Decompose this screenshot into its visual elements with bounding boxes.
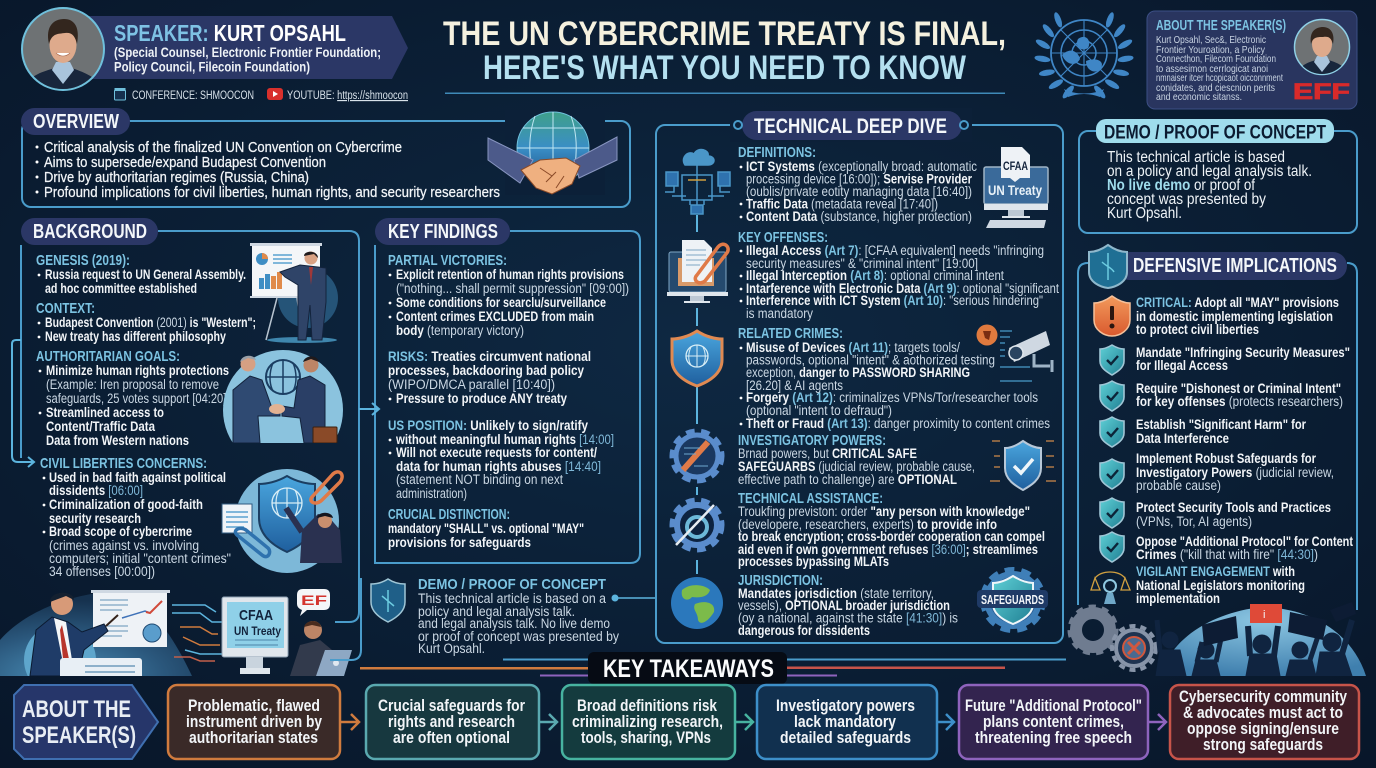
about text: conidates, and ciescnion perits xyxy=(1156,82,1275,94)
text: key offenses: KEY OFFENSES: xyxy=(738,229,828,246)
conference and youtube line: YOUTUBE: https://shmoocon xyxy=(287,90,408,102)
text: jurisdiction: (oy a national, against the state [41:30]) is xyxy=(738,610,958,626)
text: establish: Data Interference xyxy=(1136,431,1229,446)
text: authoritarian goals: Data from Western nations xyxy=(46,433,189,448)
computer screen xyxy=(222,597,288,674)
panel: background xyxy=(12,218,359,622)
text: authoritarian goals: safeguards, 25 votes support [04:20]) xyxy=(46,391,230,406)
text: definitions: Content Data (substance, higher protection) xyxy=(746,209,972,224)
demo body text: on a policy and legal analysis talk. xyxy=(1107,163,1312,180)
icon: surveillance camera xyxy=(976,324,1052,381)
icon: document and chain laptop xyxy=(667,240,728,303)
computer screen: CFAA xyxy=(239,607,273,624)
panel: about the speaker top xyxy=(1147,11,1357,109)
panel: demo lower xyxy=(330,576,656,660)
text: demo heading and body: policy and legal analysis talk. xyxy=(418,604,575,619)
text: key offenses: is mandatory xyxy=(746,306,813,321)
text: authoritarian goals: AUTHORITARIAN GOALS: xyxy=(36,348,180,365)
text: demo heading and body: DEMO / PROOF OF CONCEPT xyxy=(418,576,606,593)
text: protect xyxy=(1136,500,1331,529)
text: jurisdiction: JURISDICTION: xyxy=(738,572,823,589)
text: key offenses: Intarference with Electronic Data (Art 9): optional "significant xyxy=(746,281,1059,296)
icon: check 1 xyxy=(1100,345,1124,375)
text: context: Budapest Convention (2001) is "Western"; xyxy=(45,315,256,330)
text: genesis xyxy=(36,252,246,296)
takeaway 4: detailed safeguards xyxy=(780,729,911,747)
icon: youtube xyxy=(267,88,283,100)
icon: scales xyxy=(1091,572,1130,604)
text: technical assistance: (developere, researchers, experts) to provide info xyxy=(738,517,997,532)
demo body text: No live demo or proof of xyxy=(1107,177,1256,194)
icon: globe shield xyxy=(672,331,722,386)
text: key offenses: Illegal Interception (Art 8): optional criminal intent xyxy=(746,268,1004,283)
text: authoritarian goals: (Example: Iren proposal to remove xyxy=(46,377,219,392)
speaker name: SPEAKER: KURT OPSAHL xyxy=(114,20,346,46)
text: implement: probable cause) xyxy=(1136,478,1221,493)
text: technical assistance: Troukfing previston: order "any person with knowledge" xyxy=(738,504,1030,519)
panel: technical deep dive xyxy=(656,108,1063,643)
text: protect: Protect Security Tools and Practices xyxy=(1136,500,1331,515)
text: context: CONTEXT: xyxy=(36,300,95,317)
heading: background xyxy=(21,218,158,245)
text: vigilant engagement: implementation xyxy=(1136,591,1220,606)
text: investigatory powers xyxy=(738,432,975,487)
text: risks: (WIPO/DMCA parallel [10:40]) xyxy=(388,377,555,392)
icon: shield and chains xyxy=(222,469,342,573)
text: us position: Will not execute requests for content/ xyxy=(396,445,597,460)
icon: check 6 xyxy=(1100,532,1124,562)
small portrait xyxy=(1294,20,1350,76)
text: definitions: processing device [16:00]); Servise Provider xyxy=(746,172,973,186)
icon: gear with broken chain xyxy=(674,433,720,479)
text: critical: to protect civil liberties xyxy=(1136,322,1259,337)
overview bullets: Aims to supersede/expand Budapest Convention xyxy=(44,155,326,171)
circuit lines xyxy=(172,605,222,661)
icon: shield xyxy=(371,579,405,622)
conference and youtube line xyxy=(114,88,408,102)
gear xyxy=(1070,607,1116,653)
text: civil liberties concerns: CIVIL LIBERTIES CONCERNS: xyxy=(40,455,207,472)
text: key offenses xyxy=(738,229,1059,321)
text: investigatory powers: Brnad powers, but CRITICAL SAFE xyxy=(738,446,917,461)
arrow 4 xyxy=(938,714,954,730)
connector dot xyxy=(612,594,656,602)
icon: diplomats handshake xyxy=(223,350,343,443)
text: genesis: Russia request to UN General Assembly. xyxy=(45,267,246,282)
takeaway 5: Future "Additional Protocol" xyxy=(965,697,1142,715)
text: vigilant engagement: National Legislators monitoring xyxy=(1136,578,1305,593)
text: oppose xyxy=(1136,534,1353,562)
icon: CFAA monitor xyxy=(984,147,1048,228)
takeaway 1: authoritarian states xyxy=(189,729,318,747)
icon: CFAA monitor: UN Treaty xyxy=(988,182,1042,198)
title: THE UN CYBERCRIME TREATY IS FINAL, xyxy=(443,15,1006,53)
takeaway 2: are often optional xyxy=(393,729,510,747)
text: authoritarian goals xyxy=(36,348,230,448)
demo body text: Kurt Opsahl. xyxy=(1107,205,1182,222)
text: investigatory powers: INVESTIGATORY POWERS: xyxy=(738,432,886,449)
about text: Frontier Youroation, a Policy xyxy=(1156,44,1266,56)
text: partial victories: Content crimes EXCLUDED from main xyxy=(396,309,594,324)
arrow 5 xyxy=(1149,714,1166,730)
text: risks: Pressure to produce ANY treaty xyxy=(396,391,567,406)
demo body text: This technical article is based xyxy=(1107,149,1285,166)
speaker banner xyxy=(22,8,408,92)
icon: earth globe xyxy=(671,577,723,629)
about text: nmnaiser itcer hcopicaot oicconnment xyxy=(1156,72,1283,84)
text: us position: without meaningful human rights [14:00] xyxy=(395,432,614,447)
icon: presenter with chart xyxy=(250,243,338,343)
text: related crimes: Misuse of Devices (Art 11); targets tools/ xyxy=(746,340,960,355)
text: implement: Investigatory Powers (judicial review, xyxy=(1136,465,1334,480)
text: vigilant engagement xyxy=(1136,564,1305,606)
text: related crimes: exception, danger to PASSWORD SHARING xyxy=(746,365,970,380)
takeaway 5: plans content crimes, xyxy=(983,713,1124,731)
text: context xyxy=(36,300,256,344)
text: related crimes: Forgery (Art 12): criminalizes VPNs/Tor/researcher tools xyxy=(746,390,1038,405)
text: related crimes: RELATED CRIMES: xyxy=(738,325,843,342)
icon: check 2 xyxy=(1100,381,1124,411)
text: technical assistance: aid even if own government refuses [36:00]; streamlimes xyxy=(738,542,1038,557)
overview bullets: Drive by authoritarian regimes (Russia, China) xyxy=(44,170,309,186)
icon: check 4 xyxy=(1100,459,1124,489)
text: partial victories: ("nothing... shall permit suppression" [09:00]) xyxy=(396,281,629,296)
text: demo heading and body: or proof of concept was presented by xyxy=(418,629,619,644)
panel: demo proof of concept xyxy=(1079,119,1357,233)
speaker portrait xyxy=(22,8,104,92)
text: jurisdiction: dangerous for dissidents xyxy=(738,623,870,638)
text: jurisdiction xyxy=(738,572,958,638)
text: definitions xyxy=(738,144,977,224)
text: demo heading and body: This technical article is based on a xyxy=(418,591,606,606)
arrow: to key findings xyxy=(359,403,379,415)
icon: calendar xyxy=(114,88,126,100)
text: risks xyxy=(388,349,591,406)
flags: i xyxy=(1263,609,1265,621)
text: mandate: for Illegal Access xyxy=(1136,358,1228,373)
text: civil liberties concerns: Broad scope of cybercrime xyxy=(49,524,192,539)
text: related crimes: [26.20] & AI agents xyxy=(746,378,843,393)
flags xyxy=(1202,604,1326,646)
text: definitions: DEFINITIONS: xyxy=(738,144,816,161)
text: civil liberties concerns: (crimes against vs. involving xyxy=(49,538,199,553)
text: technical assistance xyxy=(738,490,1045,569)
text: genesis: ad hoc committee established xyxy=(45,281,197,296)
overview bullets: Critical analysis of the finalized UN Convention on Cybercrime xyxy=(44,140,402,156)
takeaway 2: rights and research xyxy=(388,713,515,731)
text: demo heading and body: and legal analysis talk. No live demo xyxy=(418,616,610,631)
about text: Connecthon, Filecom Foundation xyxy=(1156,53,1276,65)
about text: and economic sitanss. xyxy=(1156,91,1242,103)
icon: CFAA monitor: CFAA xyxy=(1003,159,1028,173)
text: crucial distinction: provisions for safeguards xyxy=(388,535,531,550)
arrow: to civil liberties xyxy=(12,340,34,467)
speaker affiliation xyxy=(114,44,381,74)
text: civil liberties concerns: Criminalization of good-faith xyxy=(49,497,203,512)
icon: gear with wrench xyxy=(674,502,720,548)
takeaway 2 xyxy=(366,685,539,759)
podium xyxy=(60,658,142,676)
text: definitions: ICT Systems (exceptionally broad: automatic xyxy=(746,159,977,174)
takeaway 3: Broad definitions risk xyxy=(577,697,718,715)
speaker affiliation: Policy Council, Filecoin Foundation) xyxy=(114,58,310,74)
heading: key findings xyxy=(375,218,510,245)
heading: overview: OVERVIEW xyxy=(33,111,119,133)
text: vigilant engagement: VIGILANT ENGAGEMENT with xyxy=(1136,564,1295,579)
text: investigatory powers: SAFEGUARBS (judicial review, probable cause, xyxy=(738,459,975,474)
text: civil liberties concerns: security research xyxy=(49,511,141,526)
text: key offenses: security measures" & "criminal intent" [19:00] xyxy=(746,256,978,271)
heading: defensive implications xyxy=(1115,252,1347,280)
heading: overview xyxy=(21,108,130,135)
about text xyxy=(1156,34,1283,103)
text: jurisdiction: Mandates jorisdiction (state territory, xyxy=(738,586,934,601)
arrow 1 xyxy=(341,714,359,730)
EFF logo: EFF xyxy=(1293,79,1350,104)
icon: critical shield xyxy=(1094,296,1130,336)
takeaway 4: Investigatory powers xyxy=(776,697,915,715)
text: related crimes: Theft or Fraud (Art 13): danger proximity to content crimes xyxy=(746,416,1050,431)
overview bullets: Profound implications for civil liberties, human rights, and security researchers xyxy=(44,185,500,201)
text: partial victories: Explicit retention of human rights provisions xyxy=(396,267,624,282)
text: definitions: (oublis/private eotity managing data [16:40]) xyxy=(746,184,972,199)
conference and youtube line: CONFERENCE: SHMOOCON xyxy=(132,90,254,102)
text: civil liberties concerns: computers; initial "content crimes" xyxy=(49,551,231,566)
text: oppose: Crimes ("kill that with fire" [44:30]) xyxy=(1136,547,1318,562)
takeaway 3: tools, sharing, VPNs xyxy=(581,729,711,747)
icon: safeguards gear xyxy=(977,572,1048,628)
icon: network xyxy=(665,150,730,214)
EFF speech bubble: EF xyxy=(301,592,328,608)
text: partial victories: body (temporary victory) xyxy=(396,323,524,338)
illustration: gears and crowd xyxy=(1070,602,1366,676)
arrow 3 xyxy=(736,714,753,730)
text: key offenses: Illegal Access (Art 7): [CFAA equivalent] needs "infringing xyxy=(746,243,1044,258)
text: risks: processes, backdooring bad policy xyxy=(388,363,584,378)
takeaway 1: Problematic, flawed xyxy=(188,697,320,715)
demo body text: concept was presented by xyxy=(1107,191,1266,208)
title: HERE'S WHAT YOU NEED TO KNOW xyxy=(483,49,967,87)
text: crucial distinction xyxy=(388,506,584,550)
EFF speech bubble xyxy=(297,589,330,616)
overview bullets xyxy=(36,140,500,201)
text: critical xyxy=(1136,295,1339,337)
text: technical assistance: to break encryption; cross-border cooperation can compel xyxy=(738,529,1045,544)
takeaway 2: Crucial safeguards for xyxy=(378,697,525,715)
text: crucial distinction: mandatory "SHALL" vs. optional "MAY" xyxy=(388,521,584,536)
illustration: presenter scene xyxy=(0,589,352,676)
text: partial victories xyxy=(388,252,629,338)
text: demo heading and body: Kurt Opsahl. xyxy=(418,641,485,656)
text: context: New treaty has different philosophy xyxy=(45,329,226,344)
text: risks: RISKS: Treaties circumvent national xyxy=(388,349,591,364)
heading: background: BACKGROUND xyxy=(33,221,147,243)
text: mandate xyxy=(1136,345,1350,373)
takeaway 1: instrument driven by xyxy=(186,713,323,731)
presenter xyxy=(30,593,118,676)
text: establish: Establish "Significant Harm" for xyxy=(1136,417,1307,432)
text: civil liberties concerns: Used in bad faith against political xyxy=(49,470,226,485)
computer screen: UN Treaty xyxy=(234,624,281,638)
text: civil liberties concerns xyxy=(40,455,231,579)
panel: about the speaker top: ABOUT THE SPEAKER(S) xyxy=(1156,18,1286,34)
title xyxy=(443,15,1006,94)
speaker affiliation: (Special Counsel, Electronic Frontier Foundation; xyxy=(114,44,381,60)
panel: overview xyxy=(21,108,630,207)
text: related crimes: (optional "intent to defraud") xyxy=(746,403,892,418)
text: crucial distinction: CRUCIAL DISTINCTION: xyxy=(388,506,510,523)
takeaway 6 xyxy=(1170,685,1359,759)
icon: UN emblem xyxy=(1034,11,1134,100)
text: investigatory powers: effective path to challenge) are OPTIONAL xyxy=(738,472,957,487)
takeaway 3 xyxy=(562,685,735,759)
demo body text xyxy=(1107,149,1312,222)
icon: check 3 xyxy=(1100,417,1124,447)
text: us position: (statement NOT binding on next xyxy=(396,472,563,487)
heading pill: DEMO / PROOF OF CONCEPT xyxy=(1104,122,1326,144)
heading: key findings: KEY FINDINGS xyxy=(388,221,498,243)
text: authoritarian goals: Content/Traffic Data xyxy=(46,419,155,434)
text: genesis: GENESIS (2019): xyxy=(36,252,130,269)
text: establish xyxy=(1136,417,1307,446)
icon: check 5 xyxy=(1100,498,1124,528)
text: related crimes xyxy=(738,325,1050,431)
takeaway 6: & advocates must act to xyxy=(1183,704,1343,722)
text: us position: data for human rights abuses [14:40] xyxy=(396,459,601,474)
arrow block: about the speakers: ABOUT THE xyxy=(22,696,131,723)
heading: technical deep dive: TECHNICAL DEEP DIVE xyxy=(754,115,947,138)
takeaway 5 xyxy=(959,685,1148,759)
text: civil liberties concerns: dissidents [06:00] xyxy=(49,483,143,498)
text: partial victories: PARTIAL VICTORIES: xyxy=(388,252,507,269)
takeaway 4 xyxy=(757,685,937,759)
takeaway 4: lack mandatory xyxy=(794,713,897,731)
text: critical: in domestic implementing legislation xyxy=(1136,309,1333,324)
arrow block: about the speakers: SPEAKER(S) xyxy=(22,722,136,749)
text: technical assistance: TECHNICAL ASSISTANCE: xyxy=(738,490,883,507)
arrow block: about the speakers xyxy=(14,685,158,759)
icon: header shield xyxy=(1089,245,1127,288)
text: require xyxy=(1136,381,1343,409)
text: civil liberties concerns: 34 offenses [00:00]) xyxy=(49,564,155,579)
text: require: for key offenses (protects researchers) xyxy=(1136,394,1343,409)
text: definitions: Traffic Data (metadata reveal [17:40]) xyxy=(746,196,938,212)
heading: key takeaways: KEY TAKEAWAYS xyxy=(603,655,774,683)
presentation board xyxy=(91,590,170,647)
about text: Kurt Opsahl, Sec&, Electronic xyxy=(1156,34,1266,46)
text: key offenses: Interference with ICT System (Art 10): "serious hindering" xyxy=(746,293,1043,308)
crowd silhouettes xyxy=(1156,620,1352,676)
takeaway 6: Cybersecurity community xyxy=(1179,688,1348,706)
text: implement: Implement Robust Safeguards for xyxy=(1136,451,1317,466)
text: protect: (VPNs, Tor, AI agents) xyxy=(1136,514,1252,529)
text: implement xyxy=(1136,451,1334,493)
text: us position: administration) xyxy=(396,486,467,501)
heading: technical deep dive xyxy=(730,108,972,142)
text: critical: CRITICAL: Adopt all "MAY" provisions xyxy=(1136,295,1339,310)
seated person xyxy=(290,621,352,676)
gear with cross xyxy=(1112,626,1156,670)
panel: defensive implications xyxy=(1078,245,1357,610)
text: us position: US POSITION: Unlikely to sign/ratify xyxy=(388,418,588,433)
text: authoritarian goals: Minimize human rights protections xyxy=(46,363,229,378)
text: jurisdiction: vessels), OPTIONAL broader jurisdiction xyxy=(738,598,950,613)
text: technical assistance: processes bypassing MLATs xyxy=(738,554,889,569)
takeaway 1 xyxy=(168,685,340,759)
takeaway 6: oppose signing/ensure xyxy=(1187,720,1339,738)
takeaway 3: criminalizing research, xyxy=(572,713,723,731)
takeaway 5: threatening free speech xyxy=(975,729,1132,747)
about text: to assesimon cerrlogicat anoi xyxy=(1156,63,1268,75)
icon: safeguards gear: SAFEGUARDS xyxy=(981,592,1044,607)
takeaway 6: strong safeguards xyxy=(1203,736,1323,754)
text: related crimes: passwords, optional "intent" & aothorized testing xyxy=(746,352,995,368)
icon: globe and handshake xyxy=(488,110,617,195)
arrow 2 xyxy=(540,714,557,730)
text: us position xyxy=(388,418,614,501)
icon: check shield xyxy=(990,441,1056,490)
text: partial victories: Some conditions for searclu/surveillance xyxy=(396,295,606,310)
text: authoritarian goals: Streamlined access to xyxy=(46,405,164,420)
text: demo heading and body xyxy=(418,576,619,656)
panel: key findings xyxy=(359,218,640,563)
